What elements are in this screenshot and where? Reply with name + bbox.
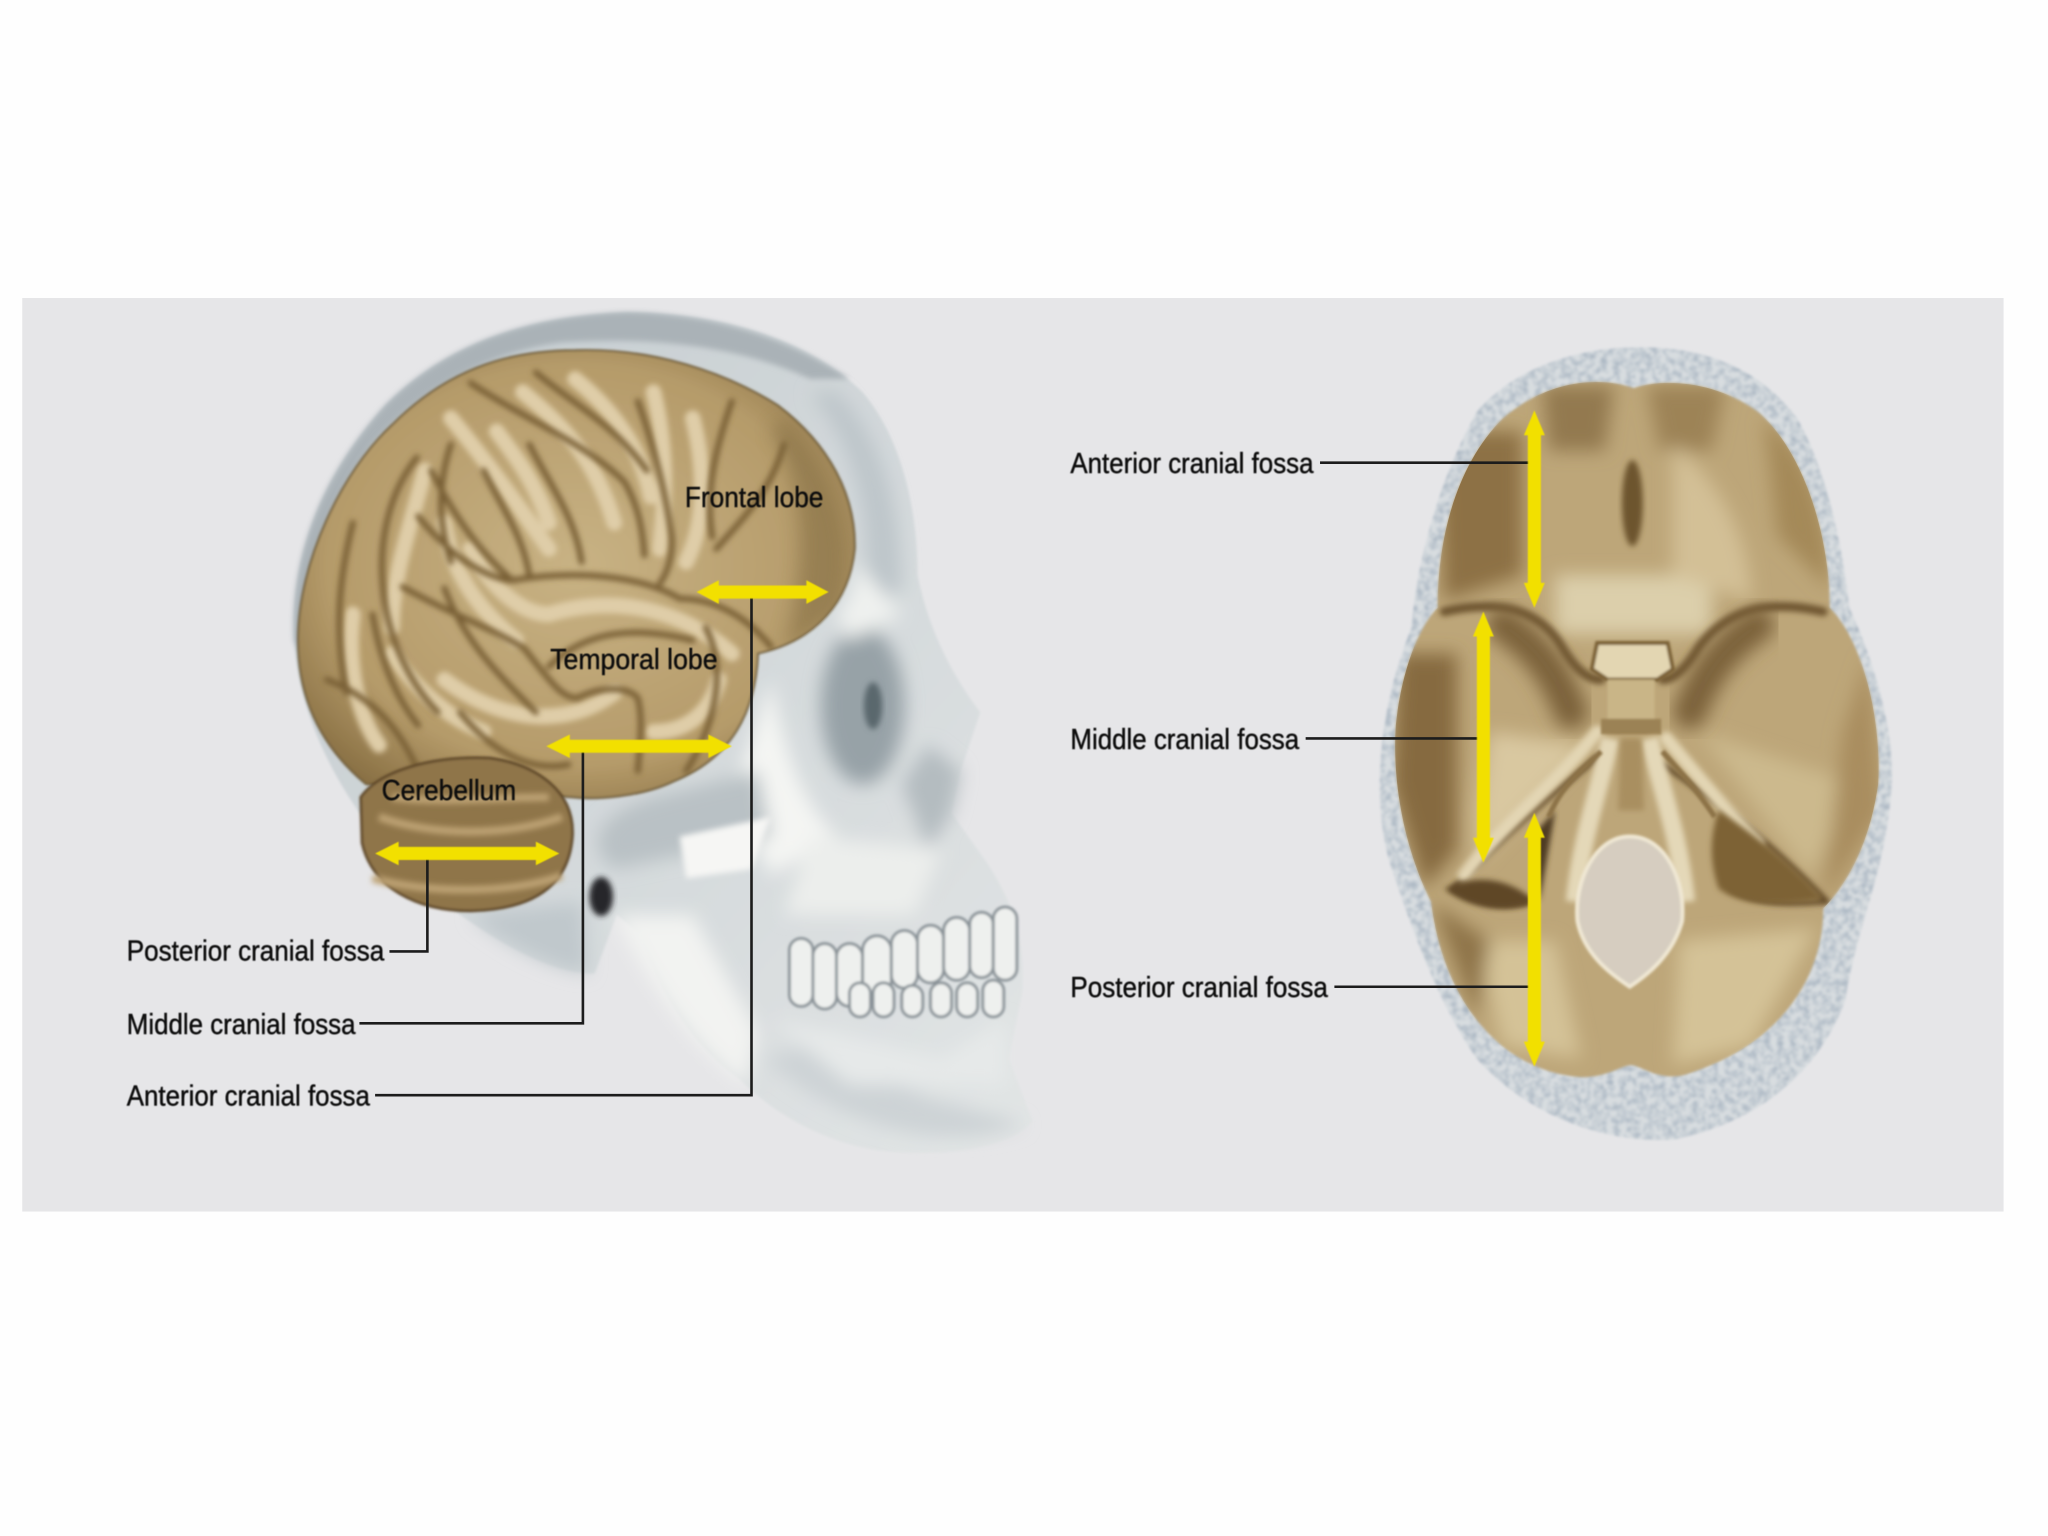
frontal crest <box>1622 460 1643 546</box>
outer bone ring <box>1380 347 1892 1140</box>
sella turcica <box>1592 643 1673 735</box>
eye socket shadow <box>864 682 882 729</box>
skull shading <box>471 392 1026 1137</box>
bone shading <box>1392 386 1882 1065</box>
arrow: frontal <box>697 580 829 604</box>
cerebellum <box>361 758 573 911</box>
skull silhouette <box>294 312 1032 1153</box>
arrow: base anterior <box>1524 410 1545 608</box>
labels: right diagram: Posterior cranial fossa <box>1070 972 1328 1004</box>
arrow: base posterior <box>1524 813 1545 1066</box>
yellow arrows <box>375 410 1545 1066</box>
foramen magnum <box>1577 836 1683 987</box>
illustration: lateral skull with brain: Temporal lobe <box>550 644 718 676</box>
labels: right diagram: Middle cranial fossa <box>1070 724 1299 756</box>
teeth <box>789 907 1017 1017</box>
illustration: lateral skull with brain: Cerebellum <box>382 775 516 807</box>
ear opening <box>589 877 613 916</box>
labels: left diagram: Middle cranial fossa <box>127 1009 355 1041</box>
labels: right diagram: Anterior cranial fossa <box>1070 448 1313 480</box>
posterior pit: left <box>1444 880 1536 909</box>
zygomatic highlight <box>680 817 771 878</box>
labels: left diagram: Posterior cranial fossa <box>127 936 384 968</box>
cerebrum <box>298 350 855 798</box>
illustration: skull base viewed from above <box>1380 347 1892 1140</box>
posterior pit: right <box>1712 810 1823 903</box>
lobe labels: Frontal lobe <box>685 482 823 514</box>
inner base of skull <box>1395 382 1879 1077</box>
clivus ridges <box>1575 738 1686 902</box>
petrous ridges <box>1453 732 1827 904</box>
arrow: base middle <box>1473 612 1494 863</box>
arrow: temporal <box>546 735 732 758</box>
illustration: lateral skull with brain <box>294 312 1032 1153</box>
labels: left diagram <box>127 936 384 1113</box>
frontal pole shading <box>771 418 847 653</box>
panel: grey illustration background <box>22 298 2004 1212</box>
leader lines <box>359 463 1534 1095</box>
labels: left diagram: Anterior cranial fossa <box>127 1081 370 1113</box>
occipital crest <box>1627 983 1635 1065</box>
sphenoid ridge shadows <box>1444 607 1823 712</box>
arrow: cerebellum <box>375 842 559 865</box>
labels: right diagram <box>1070 448 1328 1004</box>
